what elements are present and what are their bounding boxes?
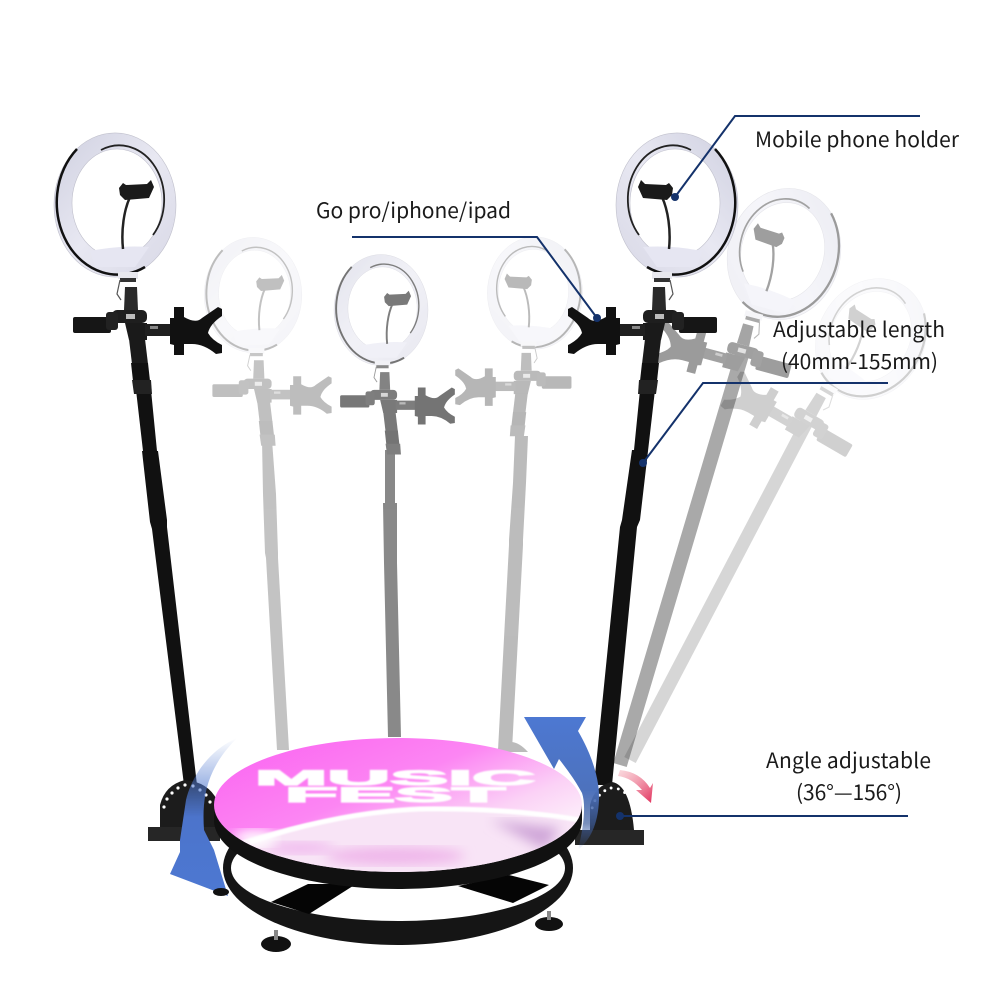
disc text: MUSIC (255, 767, 535, 790)
disc surface (214, 738, 582, 880)
arrow: blue right (524, 717, 599, 850)
arrow: blue left (170, 738, 237, 896)
main stand left (54, 133, 222, 841)
ghost stand centre (334, 255, 455, 737)
callout: angle adjustable (616, 745, 931, 820)
callout: adjustable length: Adjustable length (773, 314, 945, 344)
disc text (255, 767, 535, 807)
callout: mobile phone holder: Mobile phone holder (755, 124, 960, 154)
ghost stand second right (455, 237, 583, 752)
lower ring (223, 791, 573, 945)
cross bars (271, 875, 549, 914)
ghost stand second left (204, 237, 332, 750)
turntable (213, 738, 582, 952)
ghost stand far right (630, 258, 948, 760)
callout: angle adjustable: Angle adjustable (766, 745, 931, 775)
disc text: FEST (285, 784, 506, 807)
arrow: red (618, 770, 653, 803)
callout: adjustable length: (40mm-155mm) (781, 346, 938, 376)
callout: go pro (316, 195, 601, 322)
disc rim (214, 805, 582, 889)
callout: go pro: Go pro/iphone/ipad (316, 195, 511, 225)
callout: angle adjustable: (36°—156°) (796, 777, 902, 807)
main stand right (568, 133, 738, 845)
ghost stand tilted right (620, 175, 855, 765)
callout: mobile phone holder (671, 116, 960, 201)
callout: adjustable length (639, 314, 945, 467)
feet (213, 888, 563, 952)
